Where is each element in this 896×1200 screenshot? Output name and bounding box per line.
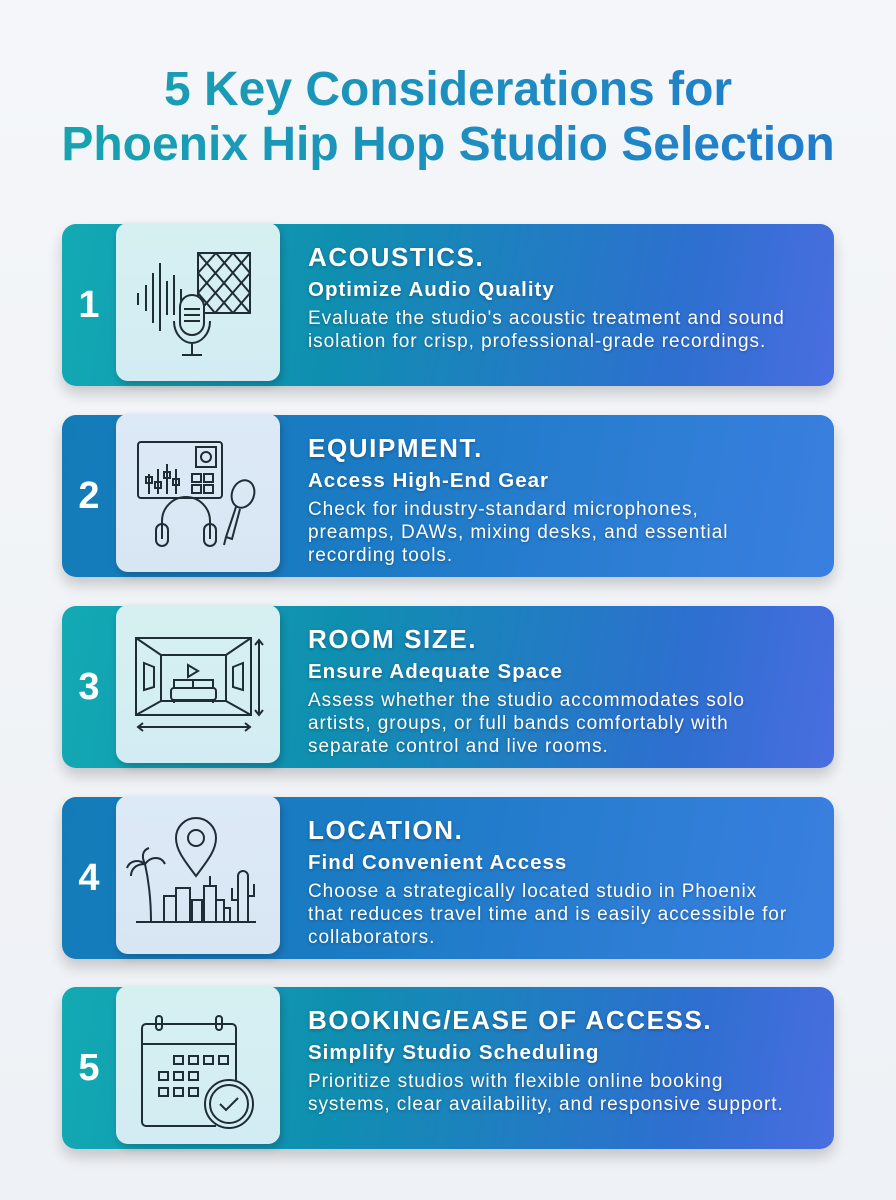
number 1: 1 (78, 284, 100, 326)
text block (308, 624, 745, 758)
number 3: 3 (78, 666, 100, 708)
panel: acoustics (62, 224, 834, 386)
icon: location (116, 796, 280, 954)
text block: Evaluate the studio's acoustic treatment and sound (308, 308, 785, 329)
text block: that reduces travel time and is easily accessible for (308, 904, 787, 925)
panel: room size (62, 606, 834, 768)
text block: Choose a strategically located studio in Phoenix (308, 881, 757, 902)
text block: recording tools. (308, 545, 453, 566)
text block (308, 433, 728, 568)
text block (308, 1005, 784, 1116)
number 4: 4 (78, 857, 100, 899)
text block: ROOM SIZE. (308, 624, 477, 654)
text block: separate control and live rooms. (308, 736, 609, 757)
text block: Ensure Adequate Space (308, 660, 563, 683)
text block: BOOKING/EASE OF ACCESS. (308, 1005, 712, 1035)
icon: acoustics (116, 223, 280, 381)
text block: Prioritize studios with flexible online booking (308, 1071, 723, 1092)
text block: Check for industry-standard microphones, (308, 499, 699, 520)
icon: equipment (116, 414, 280, 572)
title: 5 Key Considerations for (164, 63, 732, 116)
title: Phoenix Hip Hop Studio Selection (61, 118, 835, 171)
text block: Assess whether the studio accommodates solo (308, 690, 745, 711)
text block: isolation for crisp, professional-grade recordings. (308, 331, 766, 352)
text block: Optimize Audio Quality (308, 278, 555, 301)
text block: collaborators. (308, 927, 435, 948)
text block: ACOUSTICS. (308, 242, 484, 272)
text block: preamps, DAWs, mixing desks, and essential (308, 522, 728, 543)
text block: systems, clear availability, and responsive support. (308, 1094, 784, 1115)
text block: artists, groups, or full bands comfortably with (308, 713, 729, 734)
number 5: 5 (78, 1047, 100, 1089)
panel: location (62, 797, 834, 959)
text block: Simplify Studio Scheduling (308, 1041, 599, 1064)
text block: EQUIPMENT. (308, 433, 483, 463)
text block: LOCATION. (308, 815, 463, 845)
title (0, 62, 896, 172)
panel: equipment (62, 415, 834, 577)
icon: room (116, 605, 280, 763)
icon: calendar (116, 986, 280, 1144)
number 2: 2 (78, 475, 100, 517)
text block: Find Convenient Access (308, 851, 567, 874)
panel: booking (62, 987, 834, 1149)
text block (308, 815, 787, 948)
text block (308, 242, 785, 354)
text block: Access High-End Gear (308, 469, 549, 492)
